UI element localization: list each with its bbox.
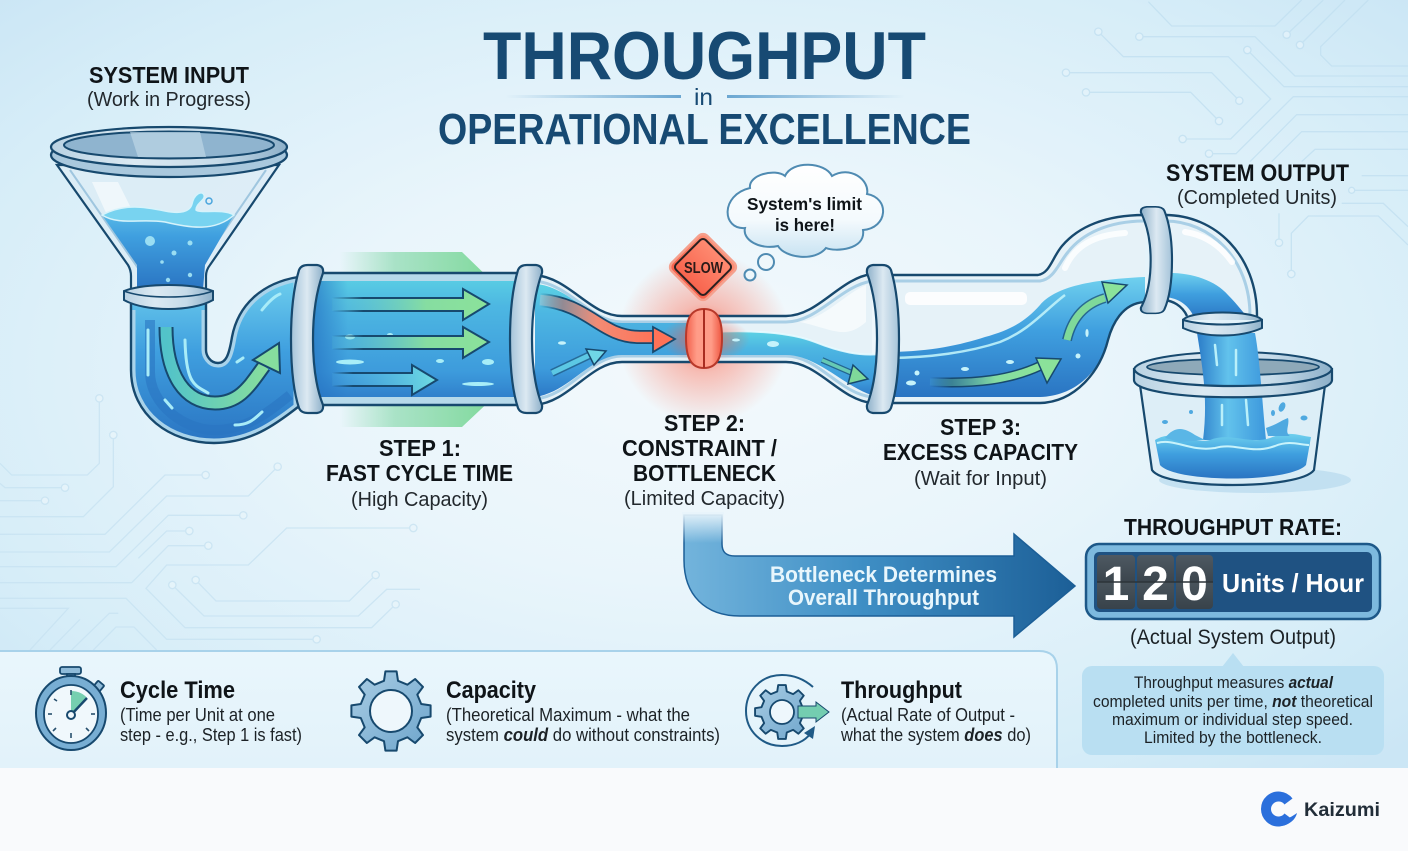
- funnel water: [102, 193, 234, 290]
- elbow collar: [1183, 312, 1262, 336]
- step 3 pipe: excess capacity: [885, 215, 1145, 403]
- label: system output: SYSTEM OUTPUT: [1166, 160, 1349, 187]
- title divider with "in": [505, 84, 905, 110]
- note callout: [1082, 653, 1384, 755]
- label: step 2: [622, 410, 785, 510]
- bucket water: [1155, 434, 1311, 478]
- digit card 1: 1: [1103, 558, 1129, 611]
- digit card 2: [1137, 555, 1174, 611]
- label: system input: [87, 62, 251, 111]
- label: system input: SYSTEM INPUT: [89, 62, 249, 88]
- logo: Kaizumi: Kaizumi: [1304, 800, 1380, 821]
- label: system input: (Work in Progress): [87, 88, 251, 111]
- funnel: [51, 127, 287, 292]
- arrow: bottleneck determines overall throughput: Overall Throughput: [788, 585, 980, 610]
- thought bubble: is here!: [775, 215, 835, 235]
- arrow: step 3 lower: [930, 358, 1061, 383]
- water stream: [1197, 333, 1266, 440]
- arrow: step 3 upper: [1067, 282, 1127, 340]
- label: step 2: (Limited Capacity): [624, 487, 785, 510]
- title divider with "in": in: [694, 84, 713, 110]
- legend: throughput: [840, 677, 1031, 745]
- arrow: small blue flow: [552, 349, 606, 373]
- label: step 3: (Wait for Input): [914, 467, 1047, 490]
- legend: cycle time: Cycle Time: [120, 677, 235, 704]
- legend: throughput: Throughput: [841, 677, 962, 704]
- legend: cycle time: [120, 677, 302, 745]
- label: step 3: STEP 3:: [940, 414, 1021, 440]
- label: step 1: STEP 1:: [379, 435, 461, 461]
- bucket front rim: [1134, 368, 1332, 397]
- digit card 3: [1176, 555, 1213, 611]
- funnel glass cone: [57, 165, 279, 292]
- label: step 1: (High Capacity): [351, 488, 488, 511]
- icon: capacity gear: [351, 671, 431, 751]
- footer band: [0, 768, 1408, 851]
- label: system output: [1166, 160, 1349, 209]
- arrow: exit flow: [822, 360, 868, 384]
- step 1 pipe: high capacity: [308, 273, 525, 405]
- slow warning sign: SLOW: [684, 260, 723, 277]
- digit card 2: 2: [1142, 558, 1169, 611]
- note callout: maximum or individual step speed.: [1112, 711, 1353, 729]
- throughput counter display: [1086, 544, 1380, 619]
- label: step 3: [883, 414, 1078, 490]
- label: step 2: STEP 2:: [664, 410, 745, 436]
- funnel rim: [51, 133, 287, 177]
- legend: capacity: Capacity: [446, 677, 537, 704]
- arrow: bottleneck determines overall throughput: Bottleneck Determines: [770, 562, 997, 587]
- label: step 2: CONSTRAINT /: [622, 435, 778, 461]
- note callout: Throughput measures actual: [1134, 674, 1333, 692]
- arrow: bottleneck determines overall throughput: [682, 512, 1075, 637]
- thought bubble: [728, 165, 883, 280]
- legend: capacity: system could do without constraints): [446, 725, 720, 745]
- arrow: fast flow 3: [332, 365, 437, 395]
- pipe flange 4: [1141, 207, 1172, 313]
- legend: capacity: (Theoretical Maximum - what the: [446, 705, 690, 725]
- U-bend pipe: [131, 277, 298, 443]
- pipe flange 2: [510, 265, 542, 413]
- bottleneck red glow: [618, 252, 790, 424]
- counter caption: (Actual System Output): [1130, 626, 1336, 649]
- label: step 1: [326, 435, 513, 511]
- U-bend flow arrow: [166, 327, 280, 403]
- thought bubble: System's limit: [747, 194, 862, 214]
- bottleneck neck pipe: [535, 274, 880, 405]
- pipe flange 3: [867, 265, 899, 413]
- counter units: Units / Hour: [1222, 568, 1364, 598]
- note callout: completed units per time, not theoretical: [1093, 693, 1373, 711]
- note callout: Limited by the bottleneck.: [1144, 729, 1322, 747]
- digit card 1: [1097, 555, 1135, 611]
- throughput rate heading: THROUGHPUT RATE:: [1124, 514, 1342, 540]
- legend: capacity: [446, 677, 720, 745]
- legend panel: [0, 651, 1057, 768]
- arrow: red restricted flow: [540, 300, 675, 352]
- label: step 1: FAST CYCLE TIME: [326, 460, 513, 486]
- title line 1: THROUGHPUT: [483, 18, 926, 94]
- digit card 3: 0: [1181, 558, 1208, 611]
- slow warning sign: [668, 232, 738, 302]
- bottleneck valve: [686, 309, 722, 368]
- output elbow pipe: [1165, 215, 1257, 320]
- receiving bucket: [1134, 333, 1351, 493]
- arrow: fast flow 1: [332, 289, 489, 320]
- pipe flange 1: [291, 265, 323, 413]
- legend: throughput: what the system does do): [840, 725, 1031, 745]
- legend: throughput: (Actual Rate of Output -: [841, 705, 1015, 725]
- title: [438, 18, 971, 154]
- flanges: [291, 207, 1172, 413]
- arrow: fast flow 2: [332, 327, 489, 358]
- icon: throughput gear with arrow: [746, 675, 829, 746]
- legend: cycle time: (Time per Unit at one: [120, 705, 275, 725]
- label: step 3: EXCESS CAPACITY: [883, 439, 1078, 465]
- funnel collar: [124, 285, 213, 309]
- label: step 2: BOTTLENECK: [633, 460, 776, 486]
- logo: Kaizumi: [1266, 796, 1380, 826]
- title line 2: OPERATIONAL EXCELLENCE: [438, 105, 971, 154]
- green capacity arrow backdrop: [340, 252, 496, 427]
- legend: cycle time: step - e.g., Step 1 is fast): [120, 725, 302, 745]
- icon: stopwatch: [36, 667, 106, 750]
- label: system output: (Completed Units): [1177, 186, 1337, 209]
